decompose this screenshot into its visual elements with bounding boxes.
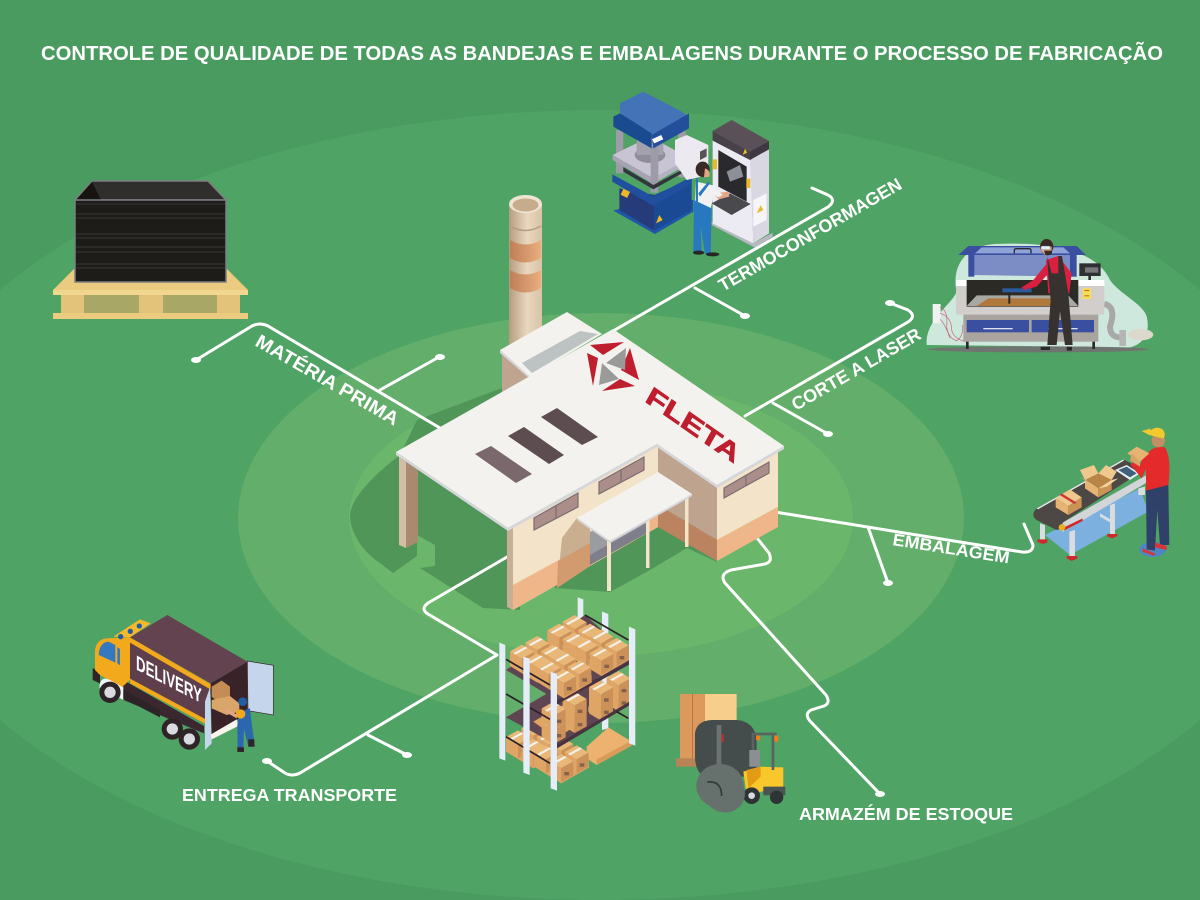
back wing (500, 312, 602, 392)
label: corte a laser: CORTE A LASER (788, 324, 924, 414)
cab (93, 619, 151, 700)
side door (205, 687, 212, 750)
pallet: matéria prima (53, 181, 248, 319)
connector lines (196, 188, 1033, 794)
label: matéria prima: MATÉRIA PRIMA (252, 330, 403, 430)
forming machine (712, 120, 773, 248)
factory shadow (350, 388, 520, 610)
bottom pallets (506, 722, 632, 783)
floor (1045, 488, 1148, 555)
cargo box (130, 615, 247, 726)
forklift (676, 694, 785, 813)
delivery worker (225, 697, 255, 752)
box: closed (1056, 489, 1082, 515)
logo: fleta (587, 342, 745, 469)
middle ellipse (238, 313, 964, 723)
laser cutter (927, 239, 1153, 352)
top pallets (510, 615, 629, 698)
truck floor (211, 719, 238, 739)
label: termoconformagen: TERMOCONFORMAGEN (715, 174, 905, 295)
cargo interior (211, 662, 247, 734)
line: embalagem (775, 512, 1033, 583)
labels (182, 174, 1013, 824)
exhaust pipe (1104, 304, 1153, 346)
windows (534, 457, 769, 530)
line: entrega (267, 557, 507, 775)
middle shelf (506, 672, 633, 745)
worker: yellow cap (1127, 428, 1169, 557)
machine body (956, 280, 1104, 349)
top shelf (506, 615, 634, 700)
chimney (509, 195, 542, 354)
monitor (1079, 263, 1101, 280)
beams (506, 615, 628, 763)
press (612, 92, 693, 234)
front uprights (499, 627, 635, 791)
label: armazém de estoque: ARMAZÉM DE ESTOQUE (799, 803, 1013, 824)
line: matéria prima (196, 324, 440, 428)
label: embalagem: EMBALAGEM (891, 530, 1011, 567)
warehouse rack (499, 597, 635, 791)
chassis (123, 680, 204, 733)
lid (958, 246, 1086, 277)
line: termoconformagem (613, 188, 832, 331)
skylights (475, 408, 598, 483)
belt (1033, 459, 1147, 532)
line: armazém (723, 538, 880, 794)
rear uprights (578, 597, 608, 730)
cargo box: DELIVERY (136, 651, 202, 708)
box: open (1079, 465, 1118, 497)
thermoforming machines (612, 92, 773, 256)
porch (577, 472, 692, 591)
porch shadow (555, 480, 717, 592)
control panel (675, 135, 708, 180)
legs (1040, 487, 1145, 557)
label: entrega transporte: ENTREGA TRANSPORTE (182, 785, 397, 805)
cargo boxes (212, 681, 239, 715)
right wing walls (658, 447, 778, 561)
line end dots (191, 300, 895, 797)
factory (396, 195, 784, 610)
packing conveyor (1033, 428, 1169, 561)
floor shadow (928, 346, 1149, 352)
stacked cartons (676, 694, 737, 767)
inner ellipse (349, 380, 853, 656)
delivery truck (93, 615, 273, 752)
line: corte a laser (745, 303, 912, 434)
middle pallets (533, 671, 632, 744)
worker: overalls (693, 162, 729, 256)
front wall (507, 445, 658, 610)
title: CONTROLE DE QUALIDADE DE TODAS AS BANDEJAS E EMBALAGENS DURANTE O PROCESSO DE FABRICAÇÃO (41, 42, 1163, 65)
forklift body (695, 720, 785, 813)
logo: fleta: FLETA (641, 382, 745, 469)
backdrop blob (927, 244, 1148, 347)
main roof (396, 329, 784, 531)
worker: red shirt (1022, 239, 1073, 351)
left pillar (399, 457, 418, 548)
rear door (247, 661, 273, 715)
power outlet (933, 304, 965, 342)
wheels (99, 682, 200, 750)
